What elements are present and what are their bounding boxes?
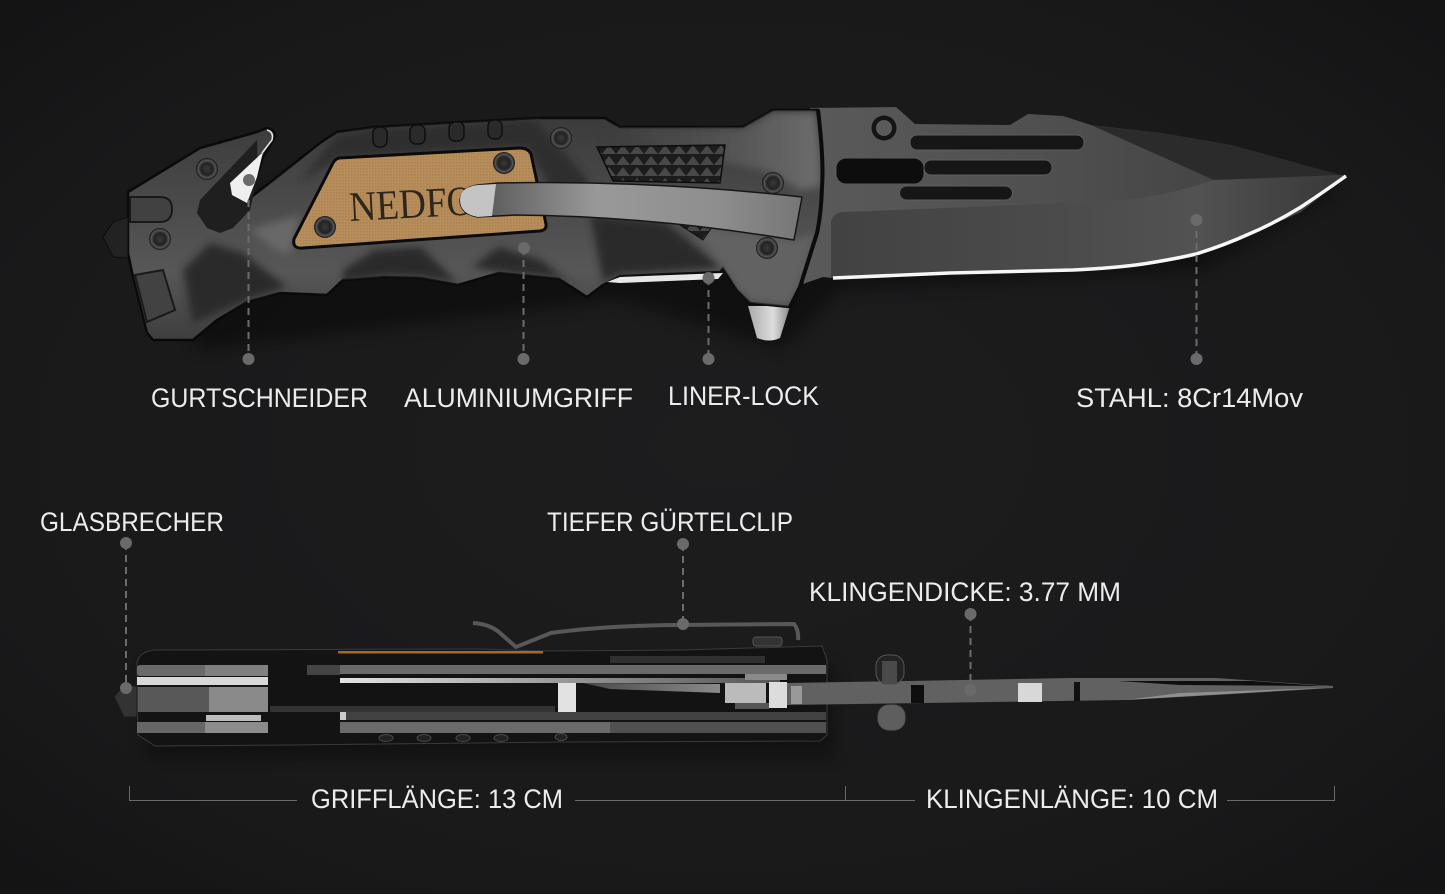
callout: Glasbrecher: GLASBRECHER [40,507,224,537]
head panels [130,130,272,322]
lower rails [270,706,826,733]
head block [137,665,268,733]
polished liner [340,678,780,683]
glass breaker tip [114,685,137,717]
knife side view [103,107,1347,350]
upper rail [307,656,826,675]
dimension: Klingenlänge [846,784,1334,814]
orange edge of scale [338,651,543,654]
callout: Aluminiumgriff: ALUMINIUMGRIFF [404,383,633,413]
liner lock steel strip [607,273,723,283]
callout: Liner-Lock [668,272,819,411]
blade thin profile [787,678,1333,705]
belt cutter recess [197,140,258,233]
dimension: Klingenlänge: KLINGENLÄNGE: 10 CM [926,784,1218,814]
callout: Klingendicke [809,577,1121,696]
pocket clip [473,623,798,647]
lower holes [379,734,567,742]
shadow [145,665,835,757]
callout: Aluminiumgriff [404,242,633,413]
callout: Klingendicke: KLINGENDICKE: 3.77 MM [809,577,1121,607]
callout: Stahl [1076,214,1303,413]
dimension: Grifflänge: GRIFFLÄNGE: 13 CM [311,784,563,814]
textured grip [597,145,725,183]
callout: Gurtschneider [151,174,368,413]
infographic canvas [41,107,1347,808]
callout: Liner-Lock: LINER-LOCK [668,381,819,411]
stop pin [558,683,576,712]
clip screw [753,637,782,646]
handle edge [790,110,822,307]
blade [800,107,1347,285]
callout: Tiefer Gürtelclip [547,507,793,630]
callout: Tiefer Gürtelclip: TIEFER GÜRTELCLIP [547,507,793,537]
top grip ridges [373,120,502,147]
glass breaker [103,217,128,258]
belt clip [460,183,802,240]
drop shadow [140,135,1340,350]
blade sliver inside [583,683,720,693]
flipper [748,306,790,340]
thumb stud [876,655,905,730]
screws [149,127,784,259]
knife top view [114,623,1333,757]
dimension: Grifflänge [130,784,846,814]
callout: Stahl: STAHL: 8Cr14Mov [1076,383,1303,413]
belt cutter blade [230,152,263,203]
tan scale with logo [294,148,546,248]
callout: Gurtschneider: GURTSCHNEIDER [151,383,368,413]
handle shading [183,112,820,323]
handle body [137,646,827,746]
callout: Glasbrecher [40,507,224,694]
pivot block [725,674,787,709]
tan scale with logo: NEDFOOS [348,176,522,231]
handle [128,110,822,340]
